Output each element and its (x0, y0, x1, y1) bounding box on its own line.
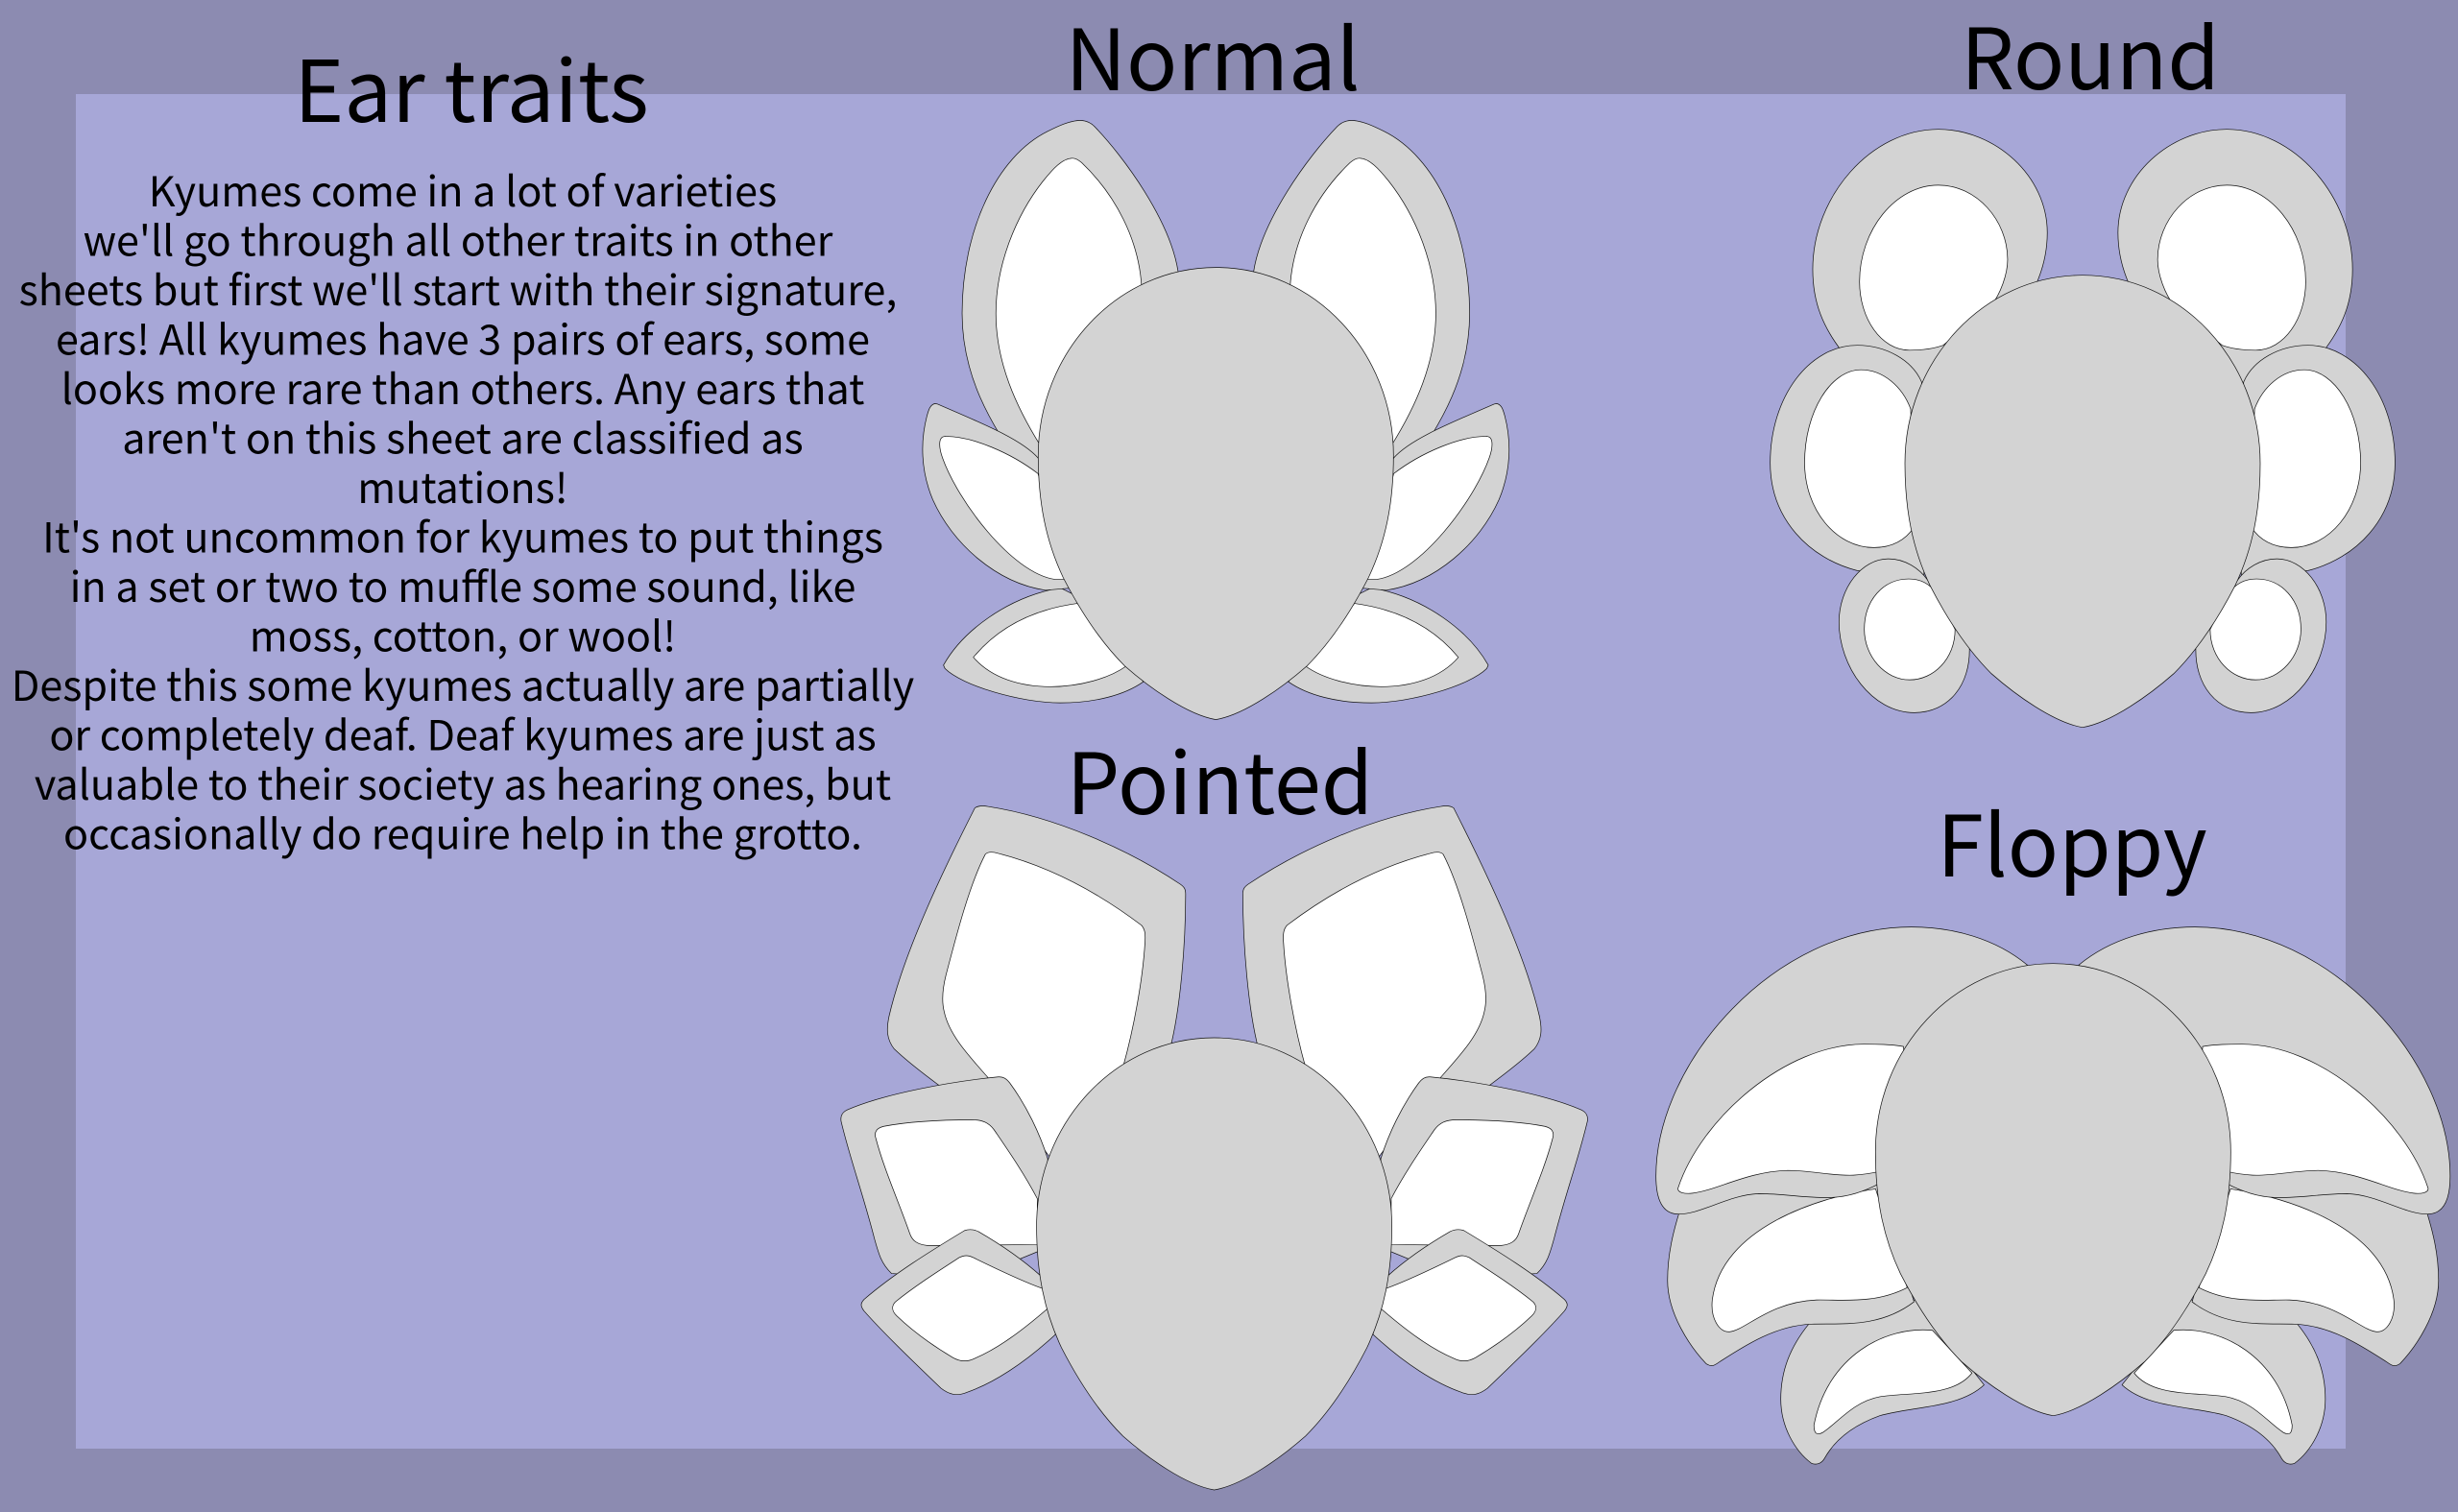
body text: we'll go through all other traits in other (84, 209, 833, 269)
heading: Pointed: Pointed (1067, 717, 1373, 839)
body text: It's not uncommon for kyumes to put things (42, 505, 883, 564)
floppy head (1875, 964, 2230, 1416)
title: Ear traits (294, 24, 649, 147)
pointed head (1037, 1038, 1392, 1490)
normal head (1038, 268, 1393, 720)
body text: occasionally do require help in the grotto. (63, 803, 862, 862)
body text: ears! All kyumes have 3 pairs of ears, some (56, 307, 870, 367)
body text: Despite this some kyumes actually are partially (12, 654, 914, 713)
diagram: floppy ears (1656, 927, 2450, 1464)
body text: valuable to their society as hearing ones, but (35, 753, 891, 812)
heading: Floppy: Floppy (1937, 780, 2207, 901)
normal ears right (1254, 121, 1509, 703)
round ears left (1771, 130, 2047, 712)
body text: Kyumes come in a lot of varieties (149, 159, 777, 219)
diagram: normal ears (923, 121, 1509, 720)
body text: moss, cotton, or wool! (250, 605, 676, 664)
body text: in a set or two to muffle some sound, like (70, 555, 855, 614)
pointed ears right (1242, 805, 1587, 1395)
body text: looks more rare than others. Any ears that (61, 357, 864, 417)
body text (12, 159, 914, 862)
body text: or completely deaf. Deaf kyumes are just as (49, 703, 877, 762)
diagram: pointed ears (841, 805, 1587, 1490)
body text: mutations! (357, 456, 568, 516)
round ears right (2118, 130, 2395, 712)
body text: aren't on this sheet are classified as (122, 407, 804, 467)
floppy ears left (1656, 927, 2027, 1464)
diagram: round ears (1771, 130, 2395, 728)
body text: sheets but first we'll start with their signature, (19, 258, 897, 318)
floppy ears right (2079, 927, 2450, 1464)
normal ears left (923, 121, 1178, 703)
round head (1905, 276, 2260, 728)
pointed ears left (841, 805, 1186, 1395)
